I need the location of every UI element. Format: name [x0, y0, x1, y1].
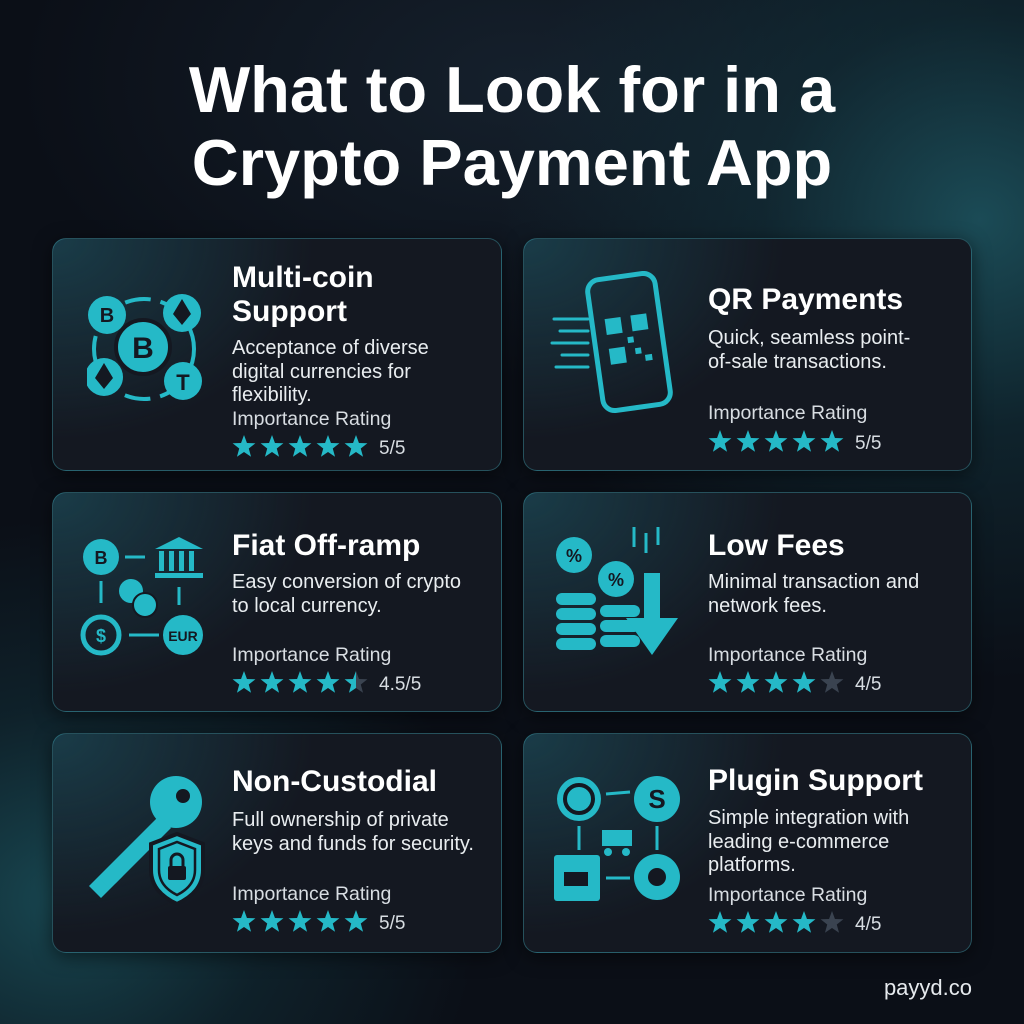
title: Crypto Payment App [192, 126, 832, 199]
panel: fiat off-ramp [52, 492, 502, 712]
icon: coins and down arrow: % [566, 546, 582, 566]
stars: 5/5 [232, 435, 405, 459]
icon: coins: B [100, 305, 114, 327]
title: What to Look for in a [189, 53, 835, 126]
description: Minimal transaction and [708, 571, 919, 593]
description: of-sale transactions. [708, 350, 887, 372]
heading: Non-Custodial [232, 765, 437, 798]
rating label: Importance Rating [232, 644, 391, 666]
icon: currency conversion: EUR [168, 628, 198, 644]
stars: 5/5 [708, 430, 881, 454]
heading: Fiat Off-ramp [232, 529, 420, 562]
panel: non-custodial [52, 733, 502, 953]
stars: 5/5 [232, 910, 405, 934]
heading: Low Fees [708, 529, 845, 562]
description [708, 807, 909, 876]
icon: coins and down arrow [556, 527, 678, 655]
description: flexibility. [232, 384, 312, 406]
description: Easy conversion of crypto [232, 571, 461, 593]
description: Full ownership of private [232, 809, 449, 831]
icon: currency conversion: B [94, 548, 108, 568]
stars: 5/5: 5/5 [855, 433, 881, 454]
stars: 4.5/5 [232, 671, 421, 695]
stars: 4/5 [708, 911, 881, 935]
description: to local currency. [232, 594, 382, 616]
rating label: Importance Rating [232, 408, 391, 430]
description: platforms. [708, 854, 796, 876]
rating label: Importance Rating [232, 883, 391, 905]
description: digital currencies for [232, 360, 411, 382]
title [189, 53, 836, 199]
panel: multi-coin support [52, 238, 502, 471]
heading: Multi-coin [232, 261, 374, 294]
description: leading e-commerce [708, 830, 889, 852]
icon: coins: B [132, 332, 154, 365]
description [232, 809, 474, 854]
description: Acceptance of diverse [232, 337, 429, 359]
icon: coins: T [176, 370, 190, 395]
rating label: Importance Rating [708, 644, 867, 666]
panel: QR payments [523, 238, 972, 471]
description: Quick, seamless point- [708, 327, 910, 349]
panel: low fees [523, 492, 972, 712]
rating label: Importance Rating [708, 884, 867, 906]
rating label: Importance Rating [708, 402, 867, 424]
description [708, 327, 910, 372]
icon: currency conversion: $ [96, 626, 106, 646]
panel: plugin support [523, 733, 972, 953]
icon: currency conversion [80, 537, 203, 656]
heading: QR Payments [708, 283, 903, 316]
footer brand: payyd.co [884, 975, 972, 1000]
stars: 4/5: 4/5 [855, 674, 881, 695]
icon: coins and down arrow: % [608, 570, 624, 590]
description [232, 571, 461, 616]
icon: plugin cycle [554, 776, 680, 901]
icon: phone QR [550, 271, 673, 413]
icon: key and shield [89, 776, 205, 902]
description: network fees. [708, 594, 827, 616]
heading: Plugin Support [708, 764, 923, 797]
stars: 4/5 [708, 671, 881, 695]
description: Simple integration with [708, 807, 909, 829]
stars: 5/5: 5/5 [379, 913, 405, 934]
heading [232, 261, 374, 328]
description [708, 571, 919, 616]
stars: 5/5: 5/5 [379, 438, 405, 459]
icon: coins [87, 294, 202, 401]
heading: Support [232, 295, 347, 328]
stars: 4.5/5: 4.5/5 [379, 674, 421, 695]
description: keys and funds for security. [232, 832, 474, 854]
icon: plugin cycle: S [648, 784, 666, 814]
description [232, 337, 429, 406]
stars: 4/5: 4/5 [855, 914, 881, 935]
